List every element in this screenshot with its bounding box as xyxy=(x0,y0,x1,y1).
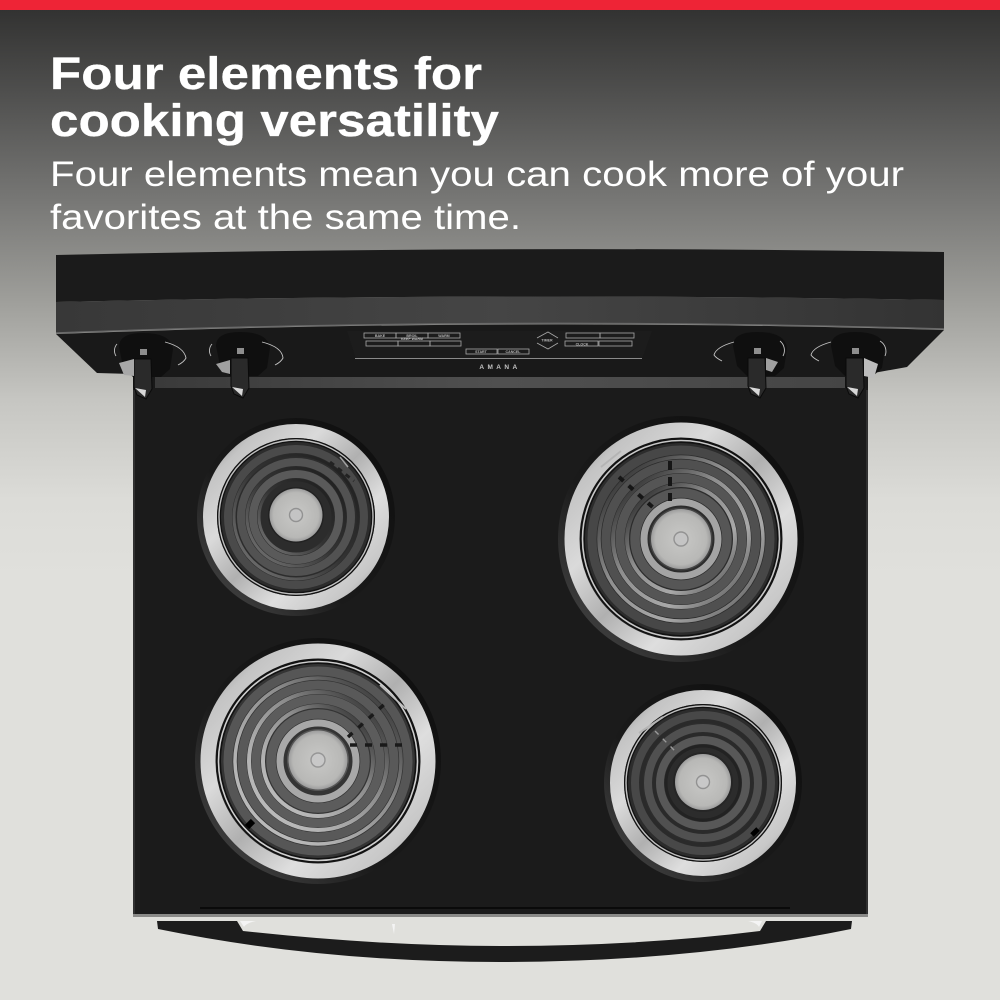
cooktop surface xyxy=(133,388,868,915)
control panel: BROIL xyxy=(406,334,418,338)
top red bar xyxy=(0,0,1000,10)
control panel: WARM xyxy=(438,334,450,338)
brand wordmark: AMANA xyxy=(479,364,521,371)
subtitle: favorites at the same time. xyxy=(50,198,521,237)
control panel: CLOCK xyxy=(576,342,589,346)
lower trim strip xyxy=(133,372,868,390)
control panel: BAKE xyxy=(375,334,386,338)
cooktop front lip xyxy=(133,914,868,917)
backguard front band xyxy=(56,296,944,333)
range cooktop xyxy=(56,249,944,962)
control panel xyxy=(347,331,652,359)
backguard top face xyxy=(56,249,944,302)
title xyxy=(50,48,499,146)
control panel: TIMER xyxy=(541,338,553,342)
control console xyxy=(56,324,944,374)
title: cooking versatility xyxy=(50,95,499,146)
subtitle: Four elements mean you can cook more of your xyxy=(50,155,904,194)
control panel: CANCEL xyxy=(506,350,521,354)
burner: rear right xyxy=(558,416,804,662)
subtitle xyxy=(50,155,904,237)
burner: front right xyxy=(604,684,802,882)
burner: rear left xyxy=(197,418,395,616)
oven door handle xyxy=(157,921,852,962)
title: Four elements for xyxy=(50,48,482,99)
control panel: START xyxy=(475,350,488,354)
control knobs xyxy=(114,332,886,399)
control panel: KEEP WARM xyxy=(401,337,423,341)
burner: front left xyxy=(195,638,441,884)
